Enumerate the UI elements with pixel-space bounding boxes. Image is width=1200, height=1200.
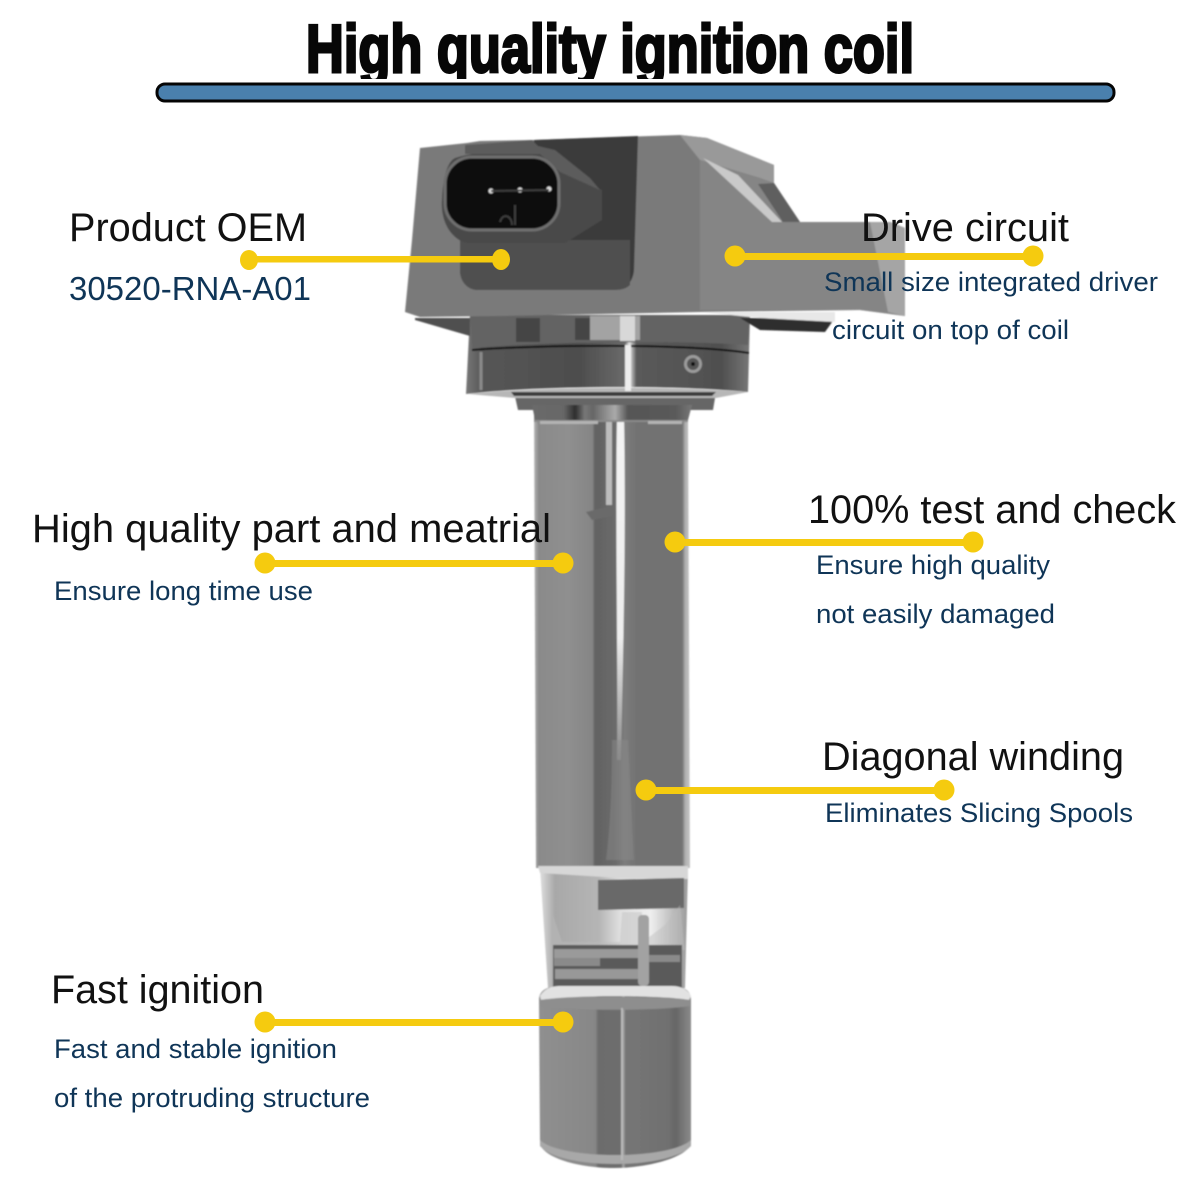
callout: diagonal winding — [636, 735, 1133, 828]
callout: product OEM: Product OEM — [69, 206, 307, 250]
callout: drive circuit: circuit on top of coil — [832, 315, 1069, 345]
callout: 100% test and check — [664, 488, 1177, 629]
callout: drive circuit: Drive circuit — [861, 206, 1069, 250]
transparent lower section — [540, 868, 688, 988]
title underline bar — [157, 84, 1114, 101]
callout: diagonal winding: Diagonal winding — [822, 735, 1124, 779]
callout: diagonal winding: Eliminates Slicing Spools — [825, 798, 1133, 828]
connector socket — [442, 152, 602, 243]
callout: 100% test and check: 100% test and check — [808, 488, 1177, 532]
callout: fast ignition: of the protruding structure — [54, 1083, 370, 1113]
callout: high quality part and material — [32, 507, 574, 606]
nozzle cap — [539, 987, 691, 1168]
flange — [415, 318, 470, 336]
callout: fast ignition — [51, 968, 574, 1113]
callout: 100% test and check: not easily damaged — [816, 599, 1055, 629]
callout: fast ignition: Fast and stable ignition — [54, 1034, 337, 1064]
collar — [514, 392, 716, 410]
callout: high quality part and material: Ensure long time use — [54, 576, 313, 606]
winding rings — [553, 945, 682, 988]
callout: product OEM: 30520-RNA-A01 — [69, 270, 311, 307]
shaft — [534, 412, 690, 868]
title: High quality ignition coil — [306, 11, 914, 87]
callout: fast ignition: Fast ignition — [51, 968, 264, 1012]
ignition coil illustration — [405, 135, 905, 1168]
callout: drive circuit: Small size integrated driver — [824, 267, 1158, 297]
callout: product OEM — [69, 206, 510, 307]
callout: high quality part and material: High quality part and meatrial — [32, 507, 551, 551]
housing body — [405, 135, 905, 317]
callout: 100% test and check: Ensure high quality — [816, 550, 1050, 580]
callout: drive circuit — [724, 206, 1158, 345]
connector recess — [460, 136, 638, 290]
housing highlight facet — [703, 158, 782, 222]
